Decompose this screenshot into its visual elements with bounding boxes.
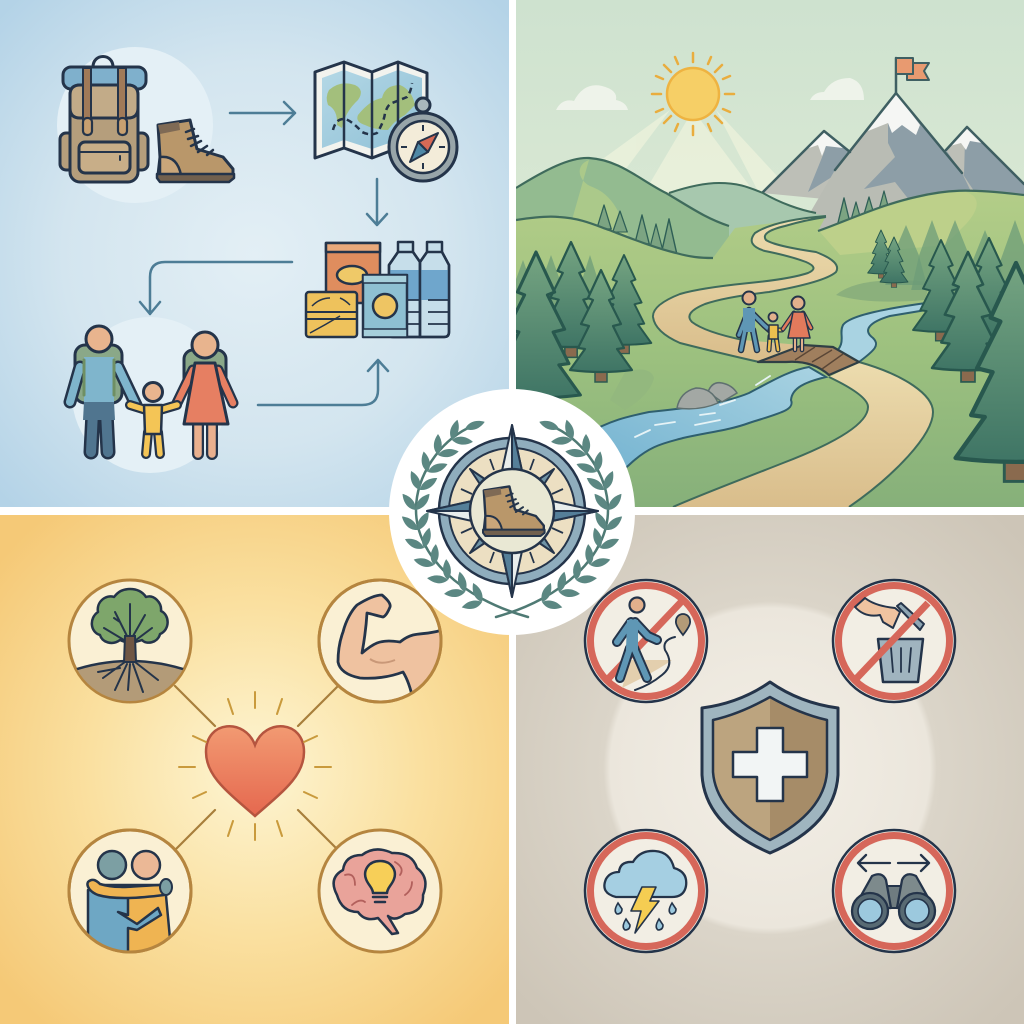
laurel wreath xyxy=(399,418,625,617)
icon: tree in circle xyxy=(68,580,192,710)
connector lines xyxy=(175,686,338,850)
icon: heart with rays xyxy=(179,692,331,840)
panel: benefits (yellow) xyxy=(0,515,509,1024)
hiking family xyxy=(739,292,811,350)
compass ring xyxy=(439,438,585,584)
arrow: to map xyxy=(230,102,295,124)
icon: clouds xyxy=(556,78,864,110)
panel: preparation (blue) xyxy=(0,0,509,507)
compass star xyxy=(427,425,598,597)
center badge: compass, boot and laurel xyxy=(389,389,635,635)
rocks xyxy=(677,383,737,409)
rolling hills xyxy=(516,158,1024,507)
arrow: to food xyxy=(367,179,387,225)
winding path xyxy=(653,216,933,507)
icon: shield with cross xyxy=(702,682,838,853)
icon: no littering prohibition xyxy=(833,580,955,702)
icon: folded map xyxy=(315,62,427,158)
icon: backpack xyxy=(60,56,148,182)
icon: embracing people in circle xyxy=(69,830,191,960)
boot xyxy=(483,486,545,536)
sun beams xyxy=(603,110,777,194)
arrow: back to food xyxy=(258,360,388,405)
icon: storm warning xyxy=(585,830,707,952)
arrow: to family xyxy=(140,262,292,314)
icon: binoculars keep distance xyxy=(833,830,955,952)
trees xyxy=(492,220,1024,481)
bridge xyxy=(758,345,859,375)
icon: brain with lightbulb in circle xyxy=(319,830,441,952)
icon: boot xyxy=(157,120,234,182)
icon: stay on trail prohibition xyxy=(585,580,707,702)
icon: flexed arm in circle xyxy=(319,580,442,702)
river xyxy=(600,302,924,468)
icon: sun xyxy=(652,53,734,135)
icon: family xyxy=(70,326,233,454)
panel: landscape (green) xyxy=(492,0,1024,507)
icon: compass xyxy=(389,98,457,181)
icon: food and water xyxy=(306,242,449,337)
mountains with flag xyxy=(762,58,1024,230)
panel: safety (beige) xyxy=(516,515,1024,1024)
